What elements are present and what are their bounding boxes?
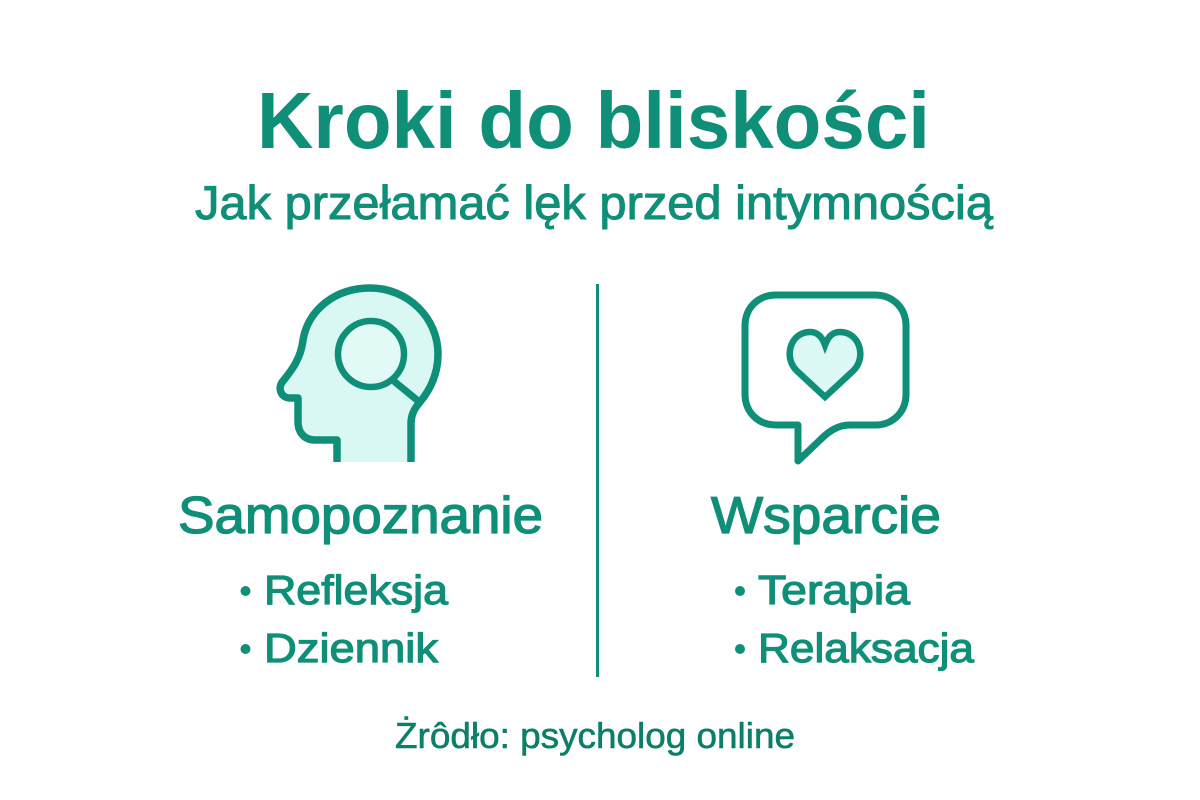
title: Kroki do bliskości [257,76,930,165]
icon: head with magnifying glass [280,288,438,462]
icon: speech bubble with heart [745,295,906,461]
subtitle: Jak przełamać lęk przed intymnością [195,176,994,229]
divider [596,284,599,677]
left list [240,567,448,671]
right list: Relaksacja [758,625,974,671]
right list: Terapia [758,567,910,613]
right heading: Wsparcie: Wsparcie [711,487,941,545]
left list: Refleksja [264,567,448,613]
source note: Żrôdło: psycholog online [395,715,795,756]
left list: Dziennik [264,625,439,671]
left heading: Samopoznanie: Samopoznanie [178,487,543,545]
right list [735,567,974,671]
